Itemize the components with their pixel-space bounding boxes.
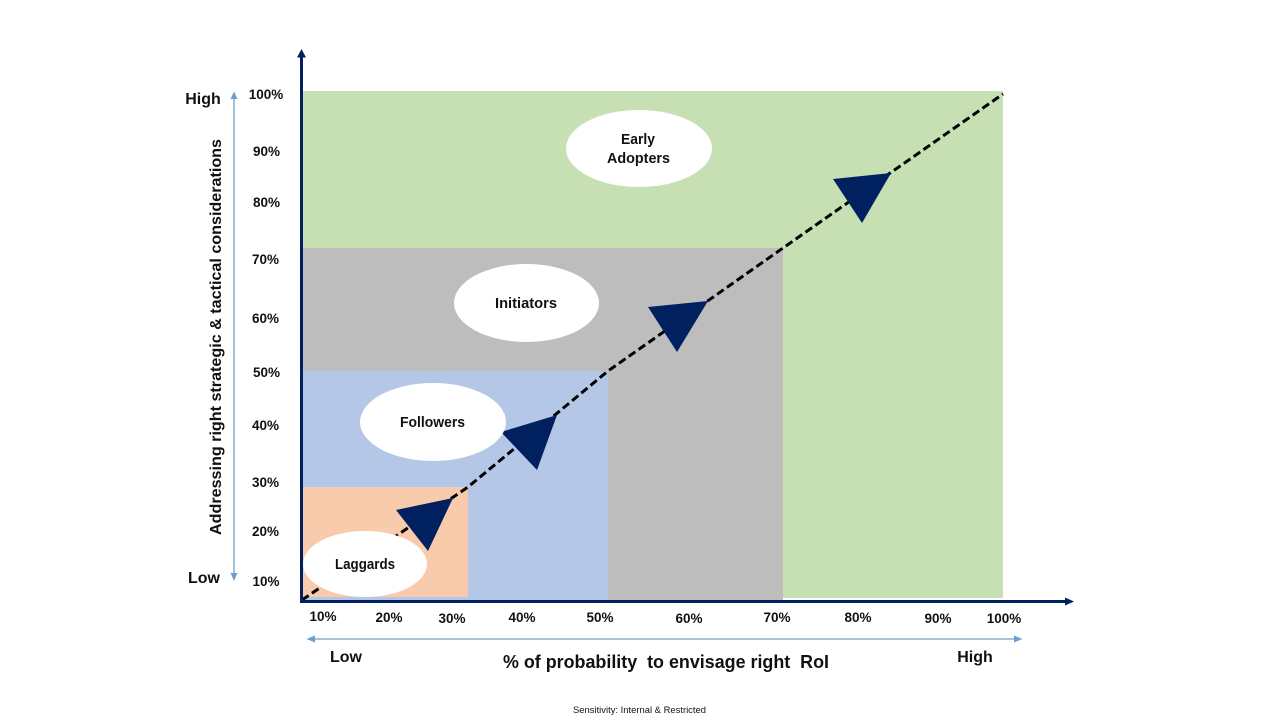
- panel: Laggards region: [302, 487, 468, 597]
- panel: Initiators region: [302, 248, 783, 600]
- icon: arrowhead 3: [648, 301, 708, 352]
- x axis High label: High: [957, 649, 993, 666]
- label: Initiators: [454, 264, 599, 342]
- y axis tick labels: 90%: [253, 144, 280, 159]
- x axis direction arrow: [306, 636, 1022, 642]
- label: Laggards: [303, 531, 427, 597]
- y axis title: Addressing right strategic & tactical considerations: [208, 139, 225, 535]
- label: Early Adopters: Adopters: [607, 151, 670, 167]
- x axis tick labels: 20%: [375, 610, 403, 625]
- x axis title: % of probability to envisage right RoI: [503, 652, 829, 672]
- y axis High label: High: [185, 91, 221, 108]
- y axis Low label: Low: [188, 570, 221, 587]
- x axis tick labels: 80%: [844, 610, 872, 625]
- axes: [297, 49, 1074, 606]
- label: Initiators: Initiators: [495, 296, 557, 312]
- dashed trend line: [302, 94, 1003, 600]
- x axis Low label: Low: [330, 649, 363, 666]
- panel: Followers region: [302, 371, 608, 600]
- label: Early Adopters: [566, 110, 712, 187]
- y axis tick labels: 80%: [253, 195, 280, 210]
- y axis tick labels: 50%: [253, 365, 280, 380]
- y axis tick labels: 10%: [252, 574, 280, 589]
- label: Followers: Followers: [400, 415, 465, 431]
- icon: arrowhead 2: [501, 415, 557, 470]
- x axis tick labels: 60%: [675, 611, 703, 626]
- label: Early Adopters: Early: [621, 132, 655, 148]
- y axis tick labels: 30%: [252, 475, 279, 490]
- label: Laggards: Laggards: [335, 557, 395, 573]
- x axis tick labels: [309, 609, 1021, 626]
- x axis tick labels: 70%: [763, 610, 791, 625]
- x axis tick labels: 10%: [309, 609, 337, 624]
- y axis tick labels: 70%: [252, 252, 279, 267]
- y axis direction arrow: [230, 92, 238, 581]
- y axis tick labels: 20%: [252, 524, 279, 539]
- panel: Early Adopters region: [302, 91, 1003, 598]
- label: Followers: [360, 383, 506, 461]
- x axis tick labels: 90%: [924, 611, 952, 626]
- x axis tick labels: 30%: [438, 611, 466, 626]
- x axis tick labels: 100%: [987, 611, 1021, 626]
- icon: arrowhead 1: [396, 498, 453, 551]
- y axis tick labels: 40%: [252, 418, 279, 433]
- icon: arrowhead 4: [833, 173, 891, 223]
- x axis tick labels: 40%: [508, 610, 536, 625]
- y axis tick labels: 100%: [249, 87, 283, 102]
- y axis tick labels: [249, 87, 283, 589]
- y axis tick labels: 60%: [252, 311, 279, 326]
- x axis tick labels: 50%: [586, 610, 614, 625]
- footer sensitivity note: Sensitivity: Internal & Restricted: [573, 705, 706, 715]
